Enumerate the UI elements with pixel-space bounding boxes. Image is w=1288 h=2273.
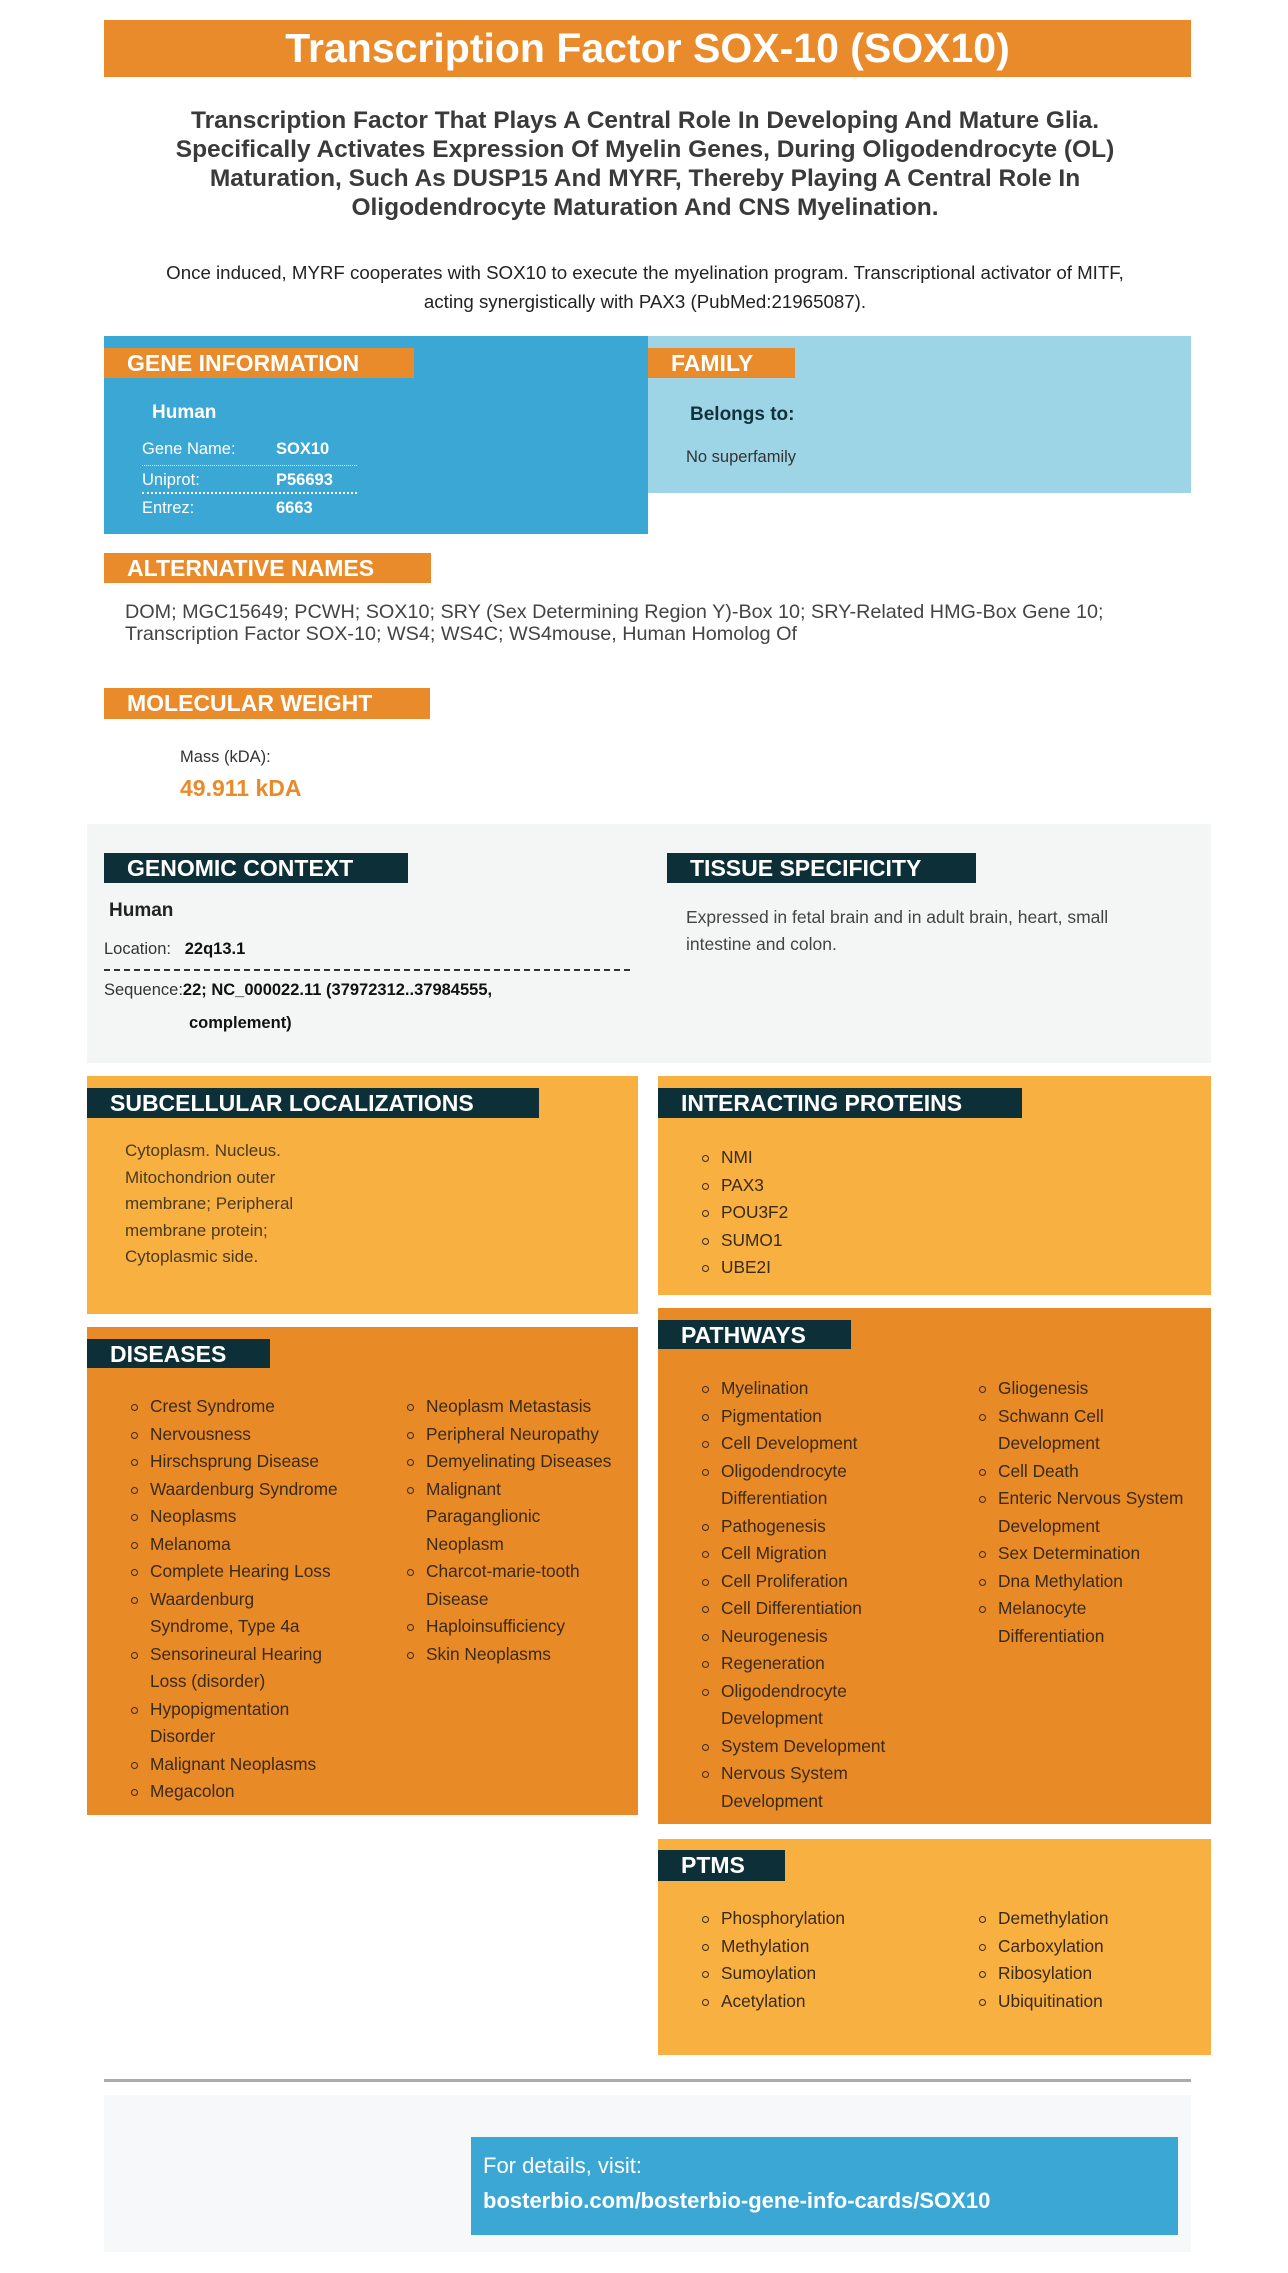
heading: family: FAMILY xyxy=(671,350,753,376)
ptms col 1: Sumoylation xyxy=(721,1963,816,1983)
pathways col 1: Neurogenesis xyxy=(721,1626,828,1646)
disease list col 1: Melanoma xyxy=(150,1534,231,1554)
description xyxy=(166,262,1124,312)
subcellular text: Cytoplasm. Nucleus. Mitochondrion outer membrane; Peripheral membrane protein; Cytoplasmic side. xyxy=(125,1141,293,1266)
ptms col 1: Methylation xyxy=(721,1936,809,1956)
gene info table: SOX10 xyxy=(276,440,329,458)
pathways col 2: Gliogenesis xyxy=(998,1378,1088,1398)
protein list xyxy=(702,1147,788,1277)
disease list col 2: Paraganglionic xyxy=(426,1506,540,1526)
footer panel xyxy=(104,2095,1191,2252)
heading: ptms xyxy=(658,1850,785,1881)
pathways col 1: Cell Migration xyxy=(721,1543,827,1563)
description: acting synergistically with PAX3 (PubMed:21965087). xyxy=(424,291,866,312)
disease list col 1: Waardenburg xyxy=(150,1588,254,1608)
disease list col 2 xyxy=(407,1396,611,1664)
pathways col 1: Nervous System xyxy=(721,1763,848,1783)
pathways col 2: Dna Methylation xyxy=(998,1570,1123,1590)
pathways col 2: Melanocyte xyxy=(998,1598,1086,1618)
disease list col 2: Neoplasm Metastasis xyxy=(426,1396,591,1416)
protein list: POU3F2 xyxy=(721,1202,788,1222)
heading: alternative names: ALTERNATIVE NAMES xyxy=(127,555,374,581)
heading: interacting xyxy=(658,1088,1022,1118)
pathways col 1: Development xyxy=(721,1708,823,1728)
heading: family xyxy=(648,348,795,378)
ptms col 2: Carboxylation xyxy=(998,1936,1104,1956)
callout: details link: For details, visit: xyxy=(483,2153,642,2178)
pathways col 1: Differentiation xyxy=(721,1488,827,1508)
genomic details: complement) xyxy=(189,1014,292,1032)
gene info table: Uniprot: xyxy=(142,471,200,489)
disease list col 2: Malignant xyxy=(426,1478,501,1498)
pathways col 1: Pigmentation xyxy=(721,1406,822,1426)
heading: genomic context: GENOMIC CONTEXT xyxy=(127,855,353,881)
disease list col 2: Skin Neoplasms xyxy=(426,1644,551,1664)
ptms col 1 xyxy=(702,1908,845,2010)
panel: subcellular localizations xyxy=(87,1076,638,1314)
pathways col 2: Enteric Nervous System xyxy=(998,1488,1183,1508)
gene info table: 6663 xyxy=(276,499,313,517)
disease list col 1: Disorder xyxy=(150,1726,215,1746)
heading: molecular weight xyxy=(104,688,430,719)
disease list col 1: Crest Syndrome xyxy=(150,1396,275,1416)
protein list: SUMO1 xyxy=(721,1230,782,1250)
tissue text: Expressed in fetal brain and in adult brain, heart, small intestine and colon. xyxy=(686,907,1108,954)
alternative names text: Transcription Factor SOX-10; WS4; WS4C; WS4mouse, Human Homolog Of xyxy=(125,623,797,645)
gene info table: Gene Name: xyxy=(142,440,236,458)
pathways col 1 xyxy=(702,1378,886,1810)
protein list: UBE2I xyxy=(721,1257,771,1277)
panel: ptms xyxy=(658,1839,1211,2055)
disease list col 1: Waardenburg Syndrome xyxy=(150,1478,338,1498)
genomic details: Sequence:22; NC_000022.11 (37972312..37984555, xyxy=(104,981,492,999)
disease list col 1: Syndrome, Type 4a xyxy=(150,1616,300,1636)
pathways col 2: Cell Death xyxy=(998,1460,1079,1480)
disease list col 2: Disease xyxy=(426,1588,488,1608)
heading: tissue specificity: TISSUE SPECIFICITY xyxy=(690,855,921,881)
title: Transcription Factor SOX-10 (SOX10) xyxy=(285,25,1010,71)
family text xyxy=(686,404,796,466)
panel: family xyxy=(648,336,1191,493)
family text: Belongs to: xyxy=(690,404,794,425)
family text: No superfamily xyxy=(686,448,796,466)
pathways col 1: Cell Development xyxy=(721,1433,857,1453)
disease list col 1: Hypopigmentation xyxy=(150,1698,289,1718)
pathways col 1: Development xyxy=(721,1790,823,1810)
panel: genomic context + tissue xyxy=(87,824,1211,1063)
subtitle: Transcription Factor That Plays A Central Role In Developing And Mature Glia. Specifically Activates Expression Of Myelin Genes, During Oligodendrocyte (OL) Maturation, Such As DUSP15 And MYRF, Thereby Playing A Central Role In Oligodendrocyte Maturation And CNS Myelination. xyxy=(176,107,1114,221)
ptms col 2: Ubiquitination xyxy=(998,1990,1103,2010)
disease list col 2: Peripheral Neuropathy xyxy=(426,1424,599,1444)
pathways col 1: Regeneration xyxy=(721,1653,825,1673)
molecular weight value: 49.911 kDA xyxy=(180,775,301,801)
genomic details: Location: 22q13.1 xyxy=(104,940,245,958)
heading: genomic context xyxy=(104,853,408,883)
disease list col 1: Malignant Neoplasms xyxy=(150,1754,316,1774)
pathways col 1: System Development xyxy=(721,1736,885,1756)
pathways col 1: Cell Proliferation xyxy=(721,1570,848,1590)
heading: alternative names xyxy=(104,553,431,583)
pathways col 2: Differentiation xyxy=(998,1626,1104,1646)
gene info table: Entrez: xyxy=(142,499,194,517)
panel: pathways xyxy=(658,1308,1211,1824)
heading: ptms: PTMS xyxy=(681,1852,745,1878)
description: Once induced, MYRF cooperates with SOX10 to execute the myelination program. Transcriptional activator of MITF, xyxy=(166,262,1124,283)
disease list col 1: Hirschsprung Disease xyxy=(150,1451,319,1471)
disease list col 1 xyxy=(131,1396,338,1801)
ptms col 2: Demethylation xyxy=(998,1908,1108,1928)
pathways col 2 xyxy=(979,1378,1183,1646)
genomic details xyxy=(104,900,630,1032)
disease list col 1: Sensorineural Hearing xyxy=(150,1644,322,1664)
ptms col 2 xyxy=(979,1908,1108,2010)
gene info table: Human xyxy=(152,402,216,423)
heading: pathways xyxy=(658,1320,851,1349)
disease list col 1: Nervousness xyxy=(150,1424,251,1444)
heading: pathways: PATHWAYS xyxy=(681,1322,806,1348)
ptms col 1: Acetylation xyxy=(721,1990,806,2010)
heading: gene information: GENE INFORMATION xyxy=(127,350,359,376)
alternative names text: DOM; MGC15649; PCWH; SOX10; SRY (Sex Determining Region Y)-Box 10; SRY-Related HMG-Box Gene 10; xyxy=(125,601,1104,623)
pathways col 2: Sex Determination xyxy=(998,1543,1140,1563)
disease list col 2: Neoplasm xyxy=(426,1534,504,1554)
pathways col 1: Oligodendrocyte xyxy=(721,1680,847,1700)
alternative names text xyxy=(125,601,1104,645)
heading: diseases: DISEASES xyxy=(110,1341,226,1367)
disease list col 1: Neoplasms xyxy=(150,1506,236,1526)
protein list: PAX3 xyxy=(721,1174,764,1194)
callout: details link xyxy=(471,2137,1178,2235)
panel: diseases xyxy=(87,1327,638,1815)
gene info table: P56693 xyxy=(276,471,333,489)
molecular weight value: Mass (kDA): xyxy=(180,748,271,766)
disease list col 1: Complete Hearing Loss xyxy=(150,1561,331,1581)
disease list col 1: Loss (disorder) xyxy=(150,1671,265,1691)
panel: gene information xyxy=(104,336,648,534)
heading: gene information xyxy=(104,348,414,378)
title xyxy=(104,20,1191,77)
pathways col 2: Schwann Cell xyxy=(998,1406,1104,1426)
disease list col 2: Charcot-marie-tooth xyxy=(426,1561,580,1581)
genomic details: Human xyxy=(109,900,173,921)
pathways col 1: Cell Differentiation xyxy=(721,1598,862,1618)
heading: diseases xyxy=(87,1339,270,1368)
disease list col 2: Haploinsufficiency xyxy=(426,1616,565,1636)
disease list col 2: Demyelinating Diseases xyxy=(426,1451,611,1471)
heading: tissue specificity xyxy=(667,853,976,883)
heading: molecular weight: MOLECULAR WEIGHT xyxy=(127,690,372,716)
disease list col 1: Megacolon xyxy=(150,1781,235,1801)
ptms col 1: Phosphorylation xyxy=(721,1908,845,1928)
pathways col 2: Development xyxy=(998,1516,1100,1536)
heading: subcellular: SUBCELLULAR LOCALIZATIONS xyxy=(110,1090,474,1116)
panel: interacting proteins xyxy=(658,1076,1211,1295)
pathways col 2: Development xyxy=(998,1433,1100,1453)
heading: interacting: INTERACTING PROTEINS xyxy=(681,1090,962,1116)
heading: subcellular xyxy=(87,1088,539,1118)
molecular weight value xyxy=(180,748,301,801)
gene info table xyxy=(142,402,357,517)
pathways col 1: Oligodendrocyte xyxy=(721,1460,847,1480)
protein list: NMI xyxy=(721,1147,753,1167)
callout: details link: bosterbio.com/bosterbio-gene-info-cards/SOX10 xyxy=(483,2188,990,2213)
pathways col 1: Myelination xyxy=(721,1378,808,1398)
ptms col 2: Ribosylation xyxy=(998,1963,1092,1983)
pathways col 1: Pathogenesis xyxy=(721,1516,826,1536)
